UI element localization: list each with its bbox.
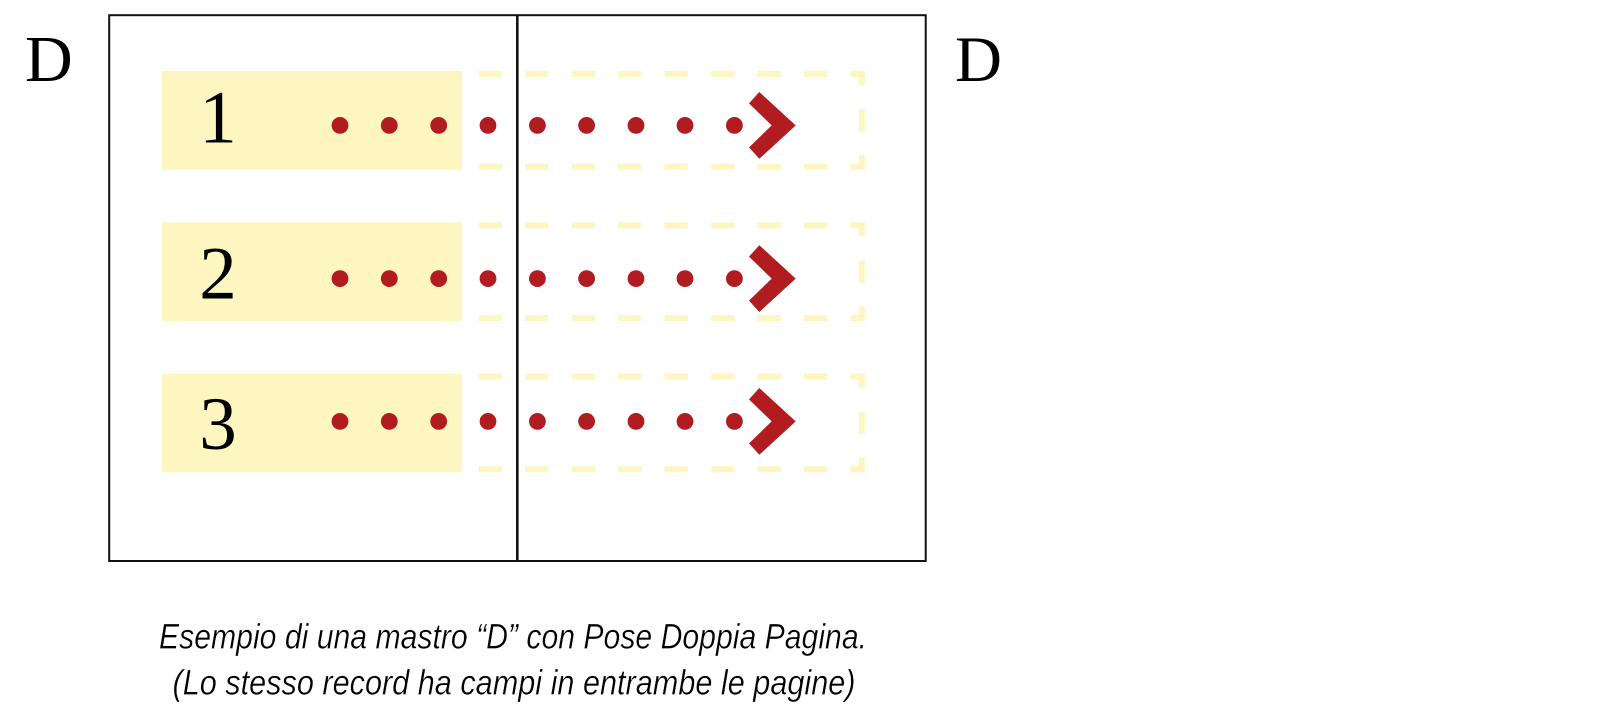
filled field block 1 xyxy=(162,71,462,170)
record row 3 xyxy=(162,374,865,472)
dashed continuation box 3 xyxy=(479,374,865,472)
dotted arrow 2 xyxy=(332,245,796,312)
filled field block 3 xyxy=(162,374,462,472)
dashed continuation box 1 xyxy=(479,71,865,170)
caption: Esempio di una mastro “D” con Pose Doppia Pagina. xyxy=(159,616,867,656)
dotted arrow 1 xyxy=(332,92,796,159)
number 1: 1 xyxy=(199,76,237,160)
caption xyxy=(159,616,867,702)
dotted arrow 3 xyxy=(332,388,796,455)
filled field block 2 xyxy=(162,222,462,321)
number 3: 3 xyxy=(199,383,237,466)
record row 1 xyxy=(162,71,865,170)
dashed continuation box 2 xyxy=(479,222,865,321)
right page label D: D xyxy=(955,24,1002,96)
number 2: 2 xyxy=(199,232,237,315)
page spread frame xyxy=(109,15,926,561)
caption: (Lo stesso record ha campi in entrambe le pagine) xyxy=(172,662,856,702)
left page label D: D xyxy=(25,23,73,96)
record row 2 xyxy=(162,222,865,321)
